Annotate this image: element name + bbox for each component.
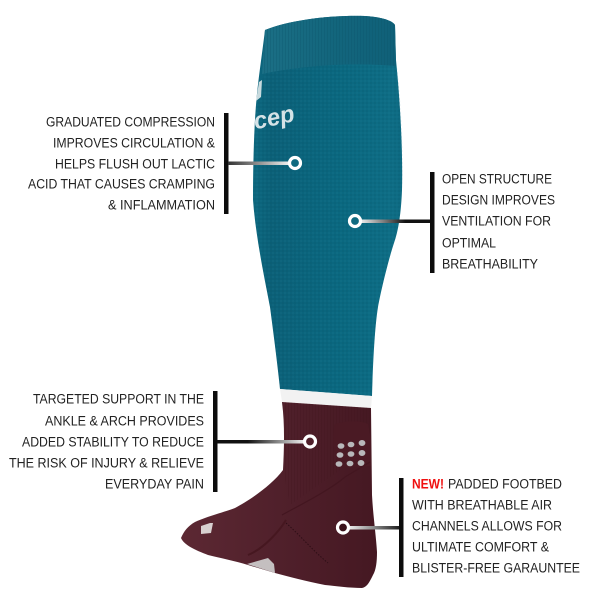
text: targeted support: ANKLE & ARCH PROVIDES <box>45 414 204 428</box>
callout: graduated compression <box>28 113 300 214</box>
text: open structure: DESIGN IMPROVES <box>442 192 555 208</box>
teal calf section <box>253 16 402 396</box>
heel panel shading <box>333 421 371 468</box>
callout: padded footbed <box>338 476 580 577</box>
text: open structure: OPTIMAL <box>442 236 496 250</box>
text: targeted support: THE RISK OF INJURY & RELIEVE <box>9 456 204 470</box>
ankle ribbing <box>282 402 371 505</box>
white band <box>280 389 372 408</box>
maroon foot section <box>181 402 377 588</box>
heel dot grid <box>336 440 365 467</box>
text: targeted support <box>9 392 204 492</box>
text: padded footbed: CHANNELS ALLOWS FOR <box>412 518 562 534</box>
text: graduated compression: HELPS FLUSH OUT LACTIC <box>55 156 215 172</box>
cep logo on calf: cep <box>251 100 297 135</box>
text: graduated compression: & INFLAMMATION <box>108 198 215 212</box>
text: padded footbed: ULTIMATE COMFORT & <box>412 540 549 554</box>
text: graduated compression: ACID THAT CAUSES CRAMPING <box>28 176 215 192</box>
text: open structure <box>442 172 555 272</box>
text: padded footbed <box>412 476 580 576</box>
sole logo <box>247 558 275 573</box>
sock illustration <box>181 16 402 588</box>
callout: open structure <box>350 172 555 273</box>
small logo mark <box>256 80 262 101</box>
cuff ribbing <box>262 16 396 74</box>
text: targeted support: ADDED STABILITY TO REDUCE <box>22 434 204 450</box>
text: targeted support: TARGETED SUPPORT IN THE <box>33 392 204 406</box>
text: open structure: BREATHABILITY <box>442 256 538 272</box>
text: targeted support: EVERYDAY PAIN <box>105 476 204 492</box>
text: padded footbed: NEW! <box>412 476 444 492</box>
callout: targeted support <box>9 391 316 492</box>
toe mark <box>201 523 213 534</box>
text: open structure: OPEN STRUCTURE <box>442 172 552 186</box>
text: padded footbed: PADDED FOOTBED <box>448 476 562 492</box>
text: padded footbed: BLISTER-FREE GARAUNTEE <box>412 560 580 576</box>
text: graduated compression: GRADUATED COMPRESSION <box>46 114 215 130</box>
text: graduated compression <box>28 114 215 212</box>
text: open structure: VENTILATION FOR <box>442 214 551 228</box>
arch panel seam <box>282 462 370 515</box>
knit texture <box>253 64 402 396</box>
text: padded footbed: WITH BREATHABLE AIR <box>412 498 552 512</box>
text: graduated compression: IMPROVES CIRCULATION & <box>53 136 215 150</box>
